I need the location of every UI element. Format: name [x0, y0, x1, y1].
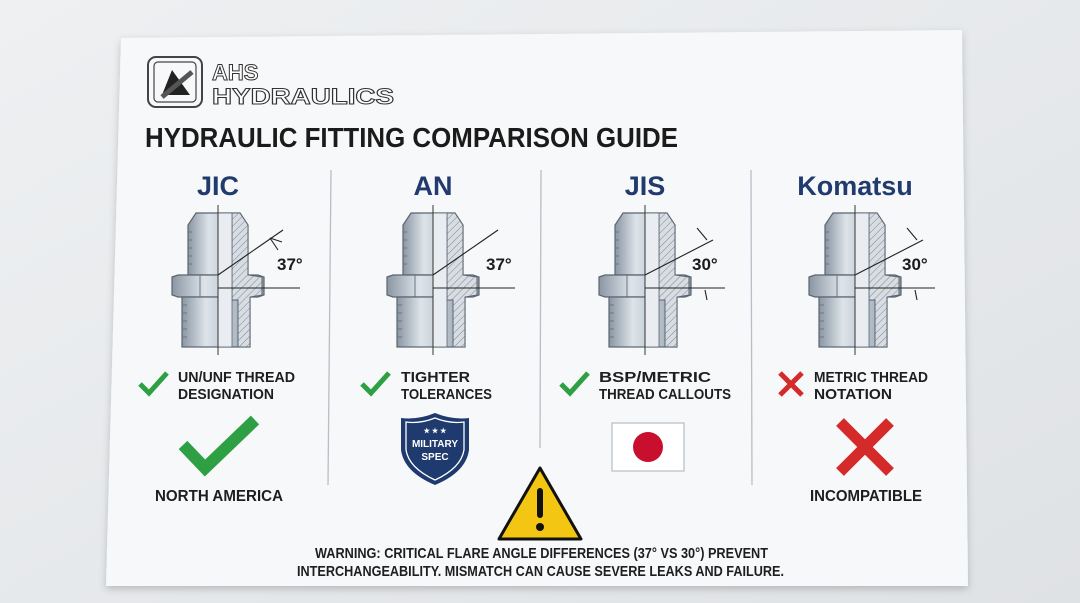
feature rows: BSP/METRIC: [599, 369, 711, 386]
dividers: [328, 170, 752, 485]
fitting: JIC: 37°: [277, 255, 303, 274]
title: HYDRAULIC FITTING COMPARISON GUIDE: [145, 122, 678, 153]
feature rows: METRIC THREAD: [814, 369, 928, 386]
shield: ★ ★ ★: [424, 427, 447, 435]
feature rows: TIGHTER: [401, 369, 470, 386]
warning text: WARNING: CRITICAL FLARE ANGLE DIFFERENCES (37° VS 30°) PREVENT: [315, 545, 768, 562]
feature rows: NOTATION: [814, 386, 892, 403]
text: NORTH AMERICA: [155, 488, 283, 505]
warning text: INTERCHANGEABILITY. MISMATCH CAN CAUSE SEVERE LEAKS AND FAILURE.: [297, 563, 784, 580]
logo: [148, 57, 394, 109]
feature rows: DESIGNATION: [178, 386, 274, 403]
text: INCOMPATIBLE: [810, 488, 922, 505]
shield: SPEC: [421, 452, 449, 463]
fitting: JIC: [172, 205, 303, 355]
feature rows: UN/UNF THREAD: [178, 369, 295, 386]
fitting: JIS: 30°: [692, 255, 718, 274]
warning text: [297, 545, 784, 580]
fitting: Komatsu: 30°: [902, 255, 928, 274]
column headers: JIC: [197, 171, 239, 201]
big check: [183, 420, 255, 468]
card: [106, 30, 968, 586]
column headers: Komatsu: [797, 171, 913, 201]
column headers: [197, 171, 913, 201]
feature rows: THREAD CALLOUTS: [599, 386, 731, 403]
fitting: AN: 37°: [486, 255, 512, 274]
feature rows: TOLERANCES: [401, 386, 492, 403]
column headers: AN: [414, 171, 452, 201]
logo: AHS: [212, 60, 258, 85]
warning icon: [499, 468, 581, 539]
shield: MILITARY: [412, 439, 458, 450]
fitting: Komatsu: [809, 205, 935, 355]
feature rows: [140, 369, 928, 403]
big X: [840, 422, 890, 472]
japan flag: [612, 423, 684, 471]
shield: [401, 413, 469, 485]
fitting: AN: [387, 205, 515, 355]
column headers: JIS: [625, 171, 665, 201]
logo: HYDRAULICS: [212, 84, 394, 109]
fitting: JIS: [599, 205, 725, 355]
